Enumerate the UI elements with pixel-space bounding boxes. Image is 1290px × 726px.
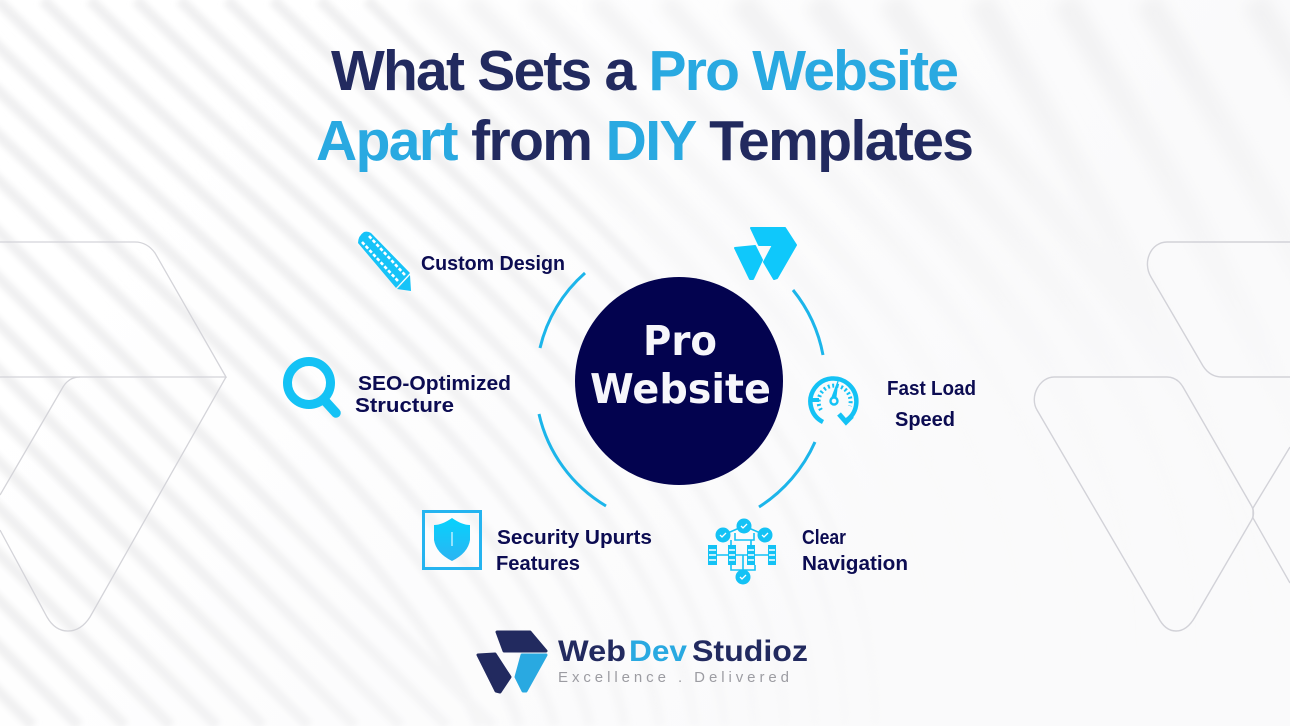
right outline shapes bbox=[1034, 242, 1290, 631]
label: Clear Navigation bbox=[802, 526, 908, 575]
label: SEO-Optimized Structure bbox=[355, 372, 511, 417]
central circle: Pro Website: Website bbox=[590, 365, 771, 413]
icon: security shield bbox=[424, 512, 480, 568]
logo: WebDev Studioz: Web bbox=[558, 635, 626, 668]
icon: pencil bbox=[358, 232, 411, 291]
label: SEO-Optimized Structure: Structure bbox=[355, 394, 454, 417]
icon: magnifying glass bbox=[288, 362, 336, 413]
left outline shapes bbox=[0, 242, 226, 631]
label: Clear Navigation: Navigation bbox=[802, 552, 908, 575]
title bbox=[316, 39, 974, 173]
icon: cyan logo mark bbox=[735, 228, 796, 279]
logo: WebDev Studioz bbox=[478, 632, 808, 692]
label: Security Upurts Features: Security Upurts bbox=[497, 526, 652, 549]
icon: speedometer bbox=[809, 378, 856, 422]
logo: WebDev Studioz: Studioz bbox=[692, 635, 808, 668]
label: Custom Design: Custom Design bbox=[421, 252, 565, 275]
label: Clear Navigation: Clear bbox=[802, 526, 846, 549]
label: Fast Load Speed: Fast Load bbox=[887, 377, 976, 400]
label: Security Upurts Features: Features bbox=[496, 552, 580, 575]
label: SEO-Optimized Structure: SEO-Optimized bbox=[358, 372, 511, 395]
central circle: Pro Website: Pro bbox=[643, 317, 717, 365]
label: Fast Load Speed bbox=[887, 377, 976, 431]
icon: site navigation tree bbox=[708, 518, 776, 584]
logo: WebDev Studioz: Excellence . Delivered bbox=[558, 669, 789, 686]
central circle: Pro Website bbox=[575, 277, 783, 485]
title: What Sets a Pro Website bbox=[331, 39, 959, 103]
label: Security Upurts Features bbox=[496, 526, 652, 575]
logo: WebDev Studioz: Dev bbox=[629, 635, 687, 668]
title: Apart from DIY Templates bbox=[316, 109, 974, 173]
ring of arc segments bbox=[539, 273, 823, 507]
label: Fast Load Speed: Speed bbox=[895, 408, 955, 431]
